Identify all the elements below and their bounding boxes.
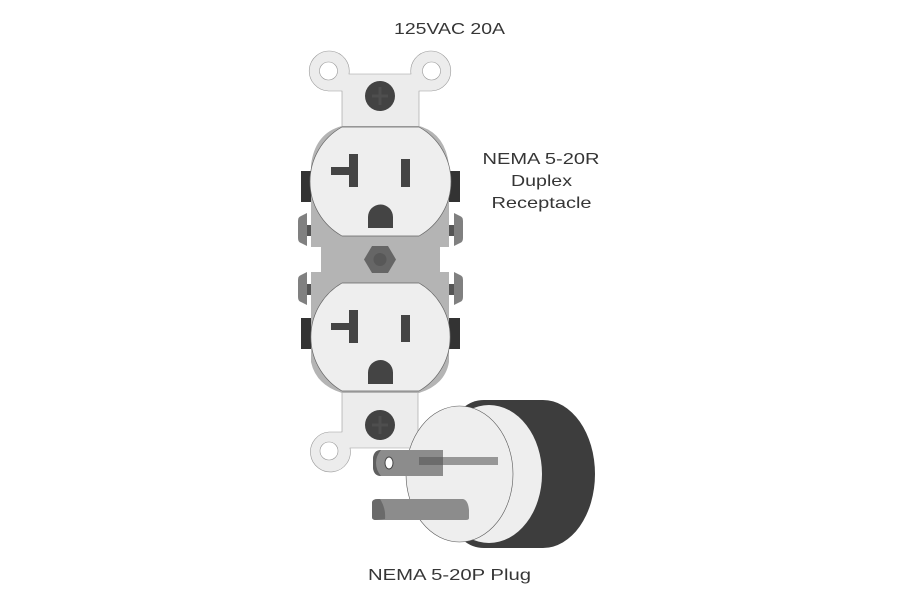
title: rating: 125VAC 20A: [394, 21, 505, 38]
label: receptacle: Receptacle: [492, 195, 592, 212]
bottom outlet ground hole: [368, 360, 393, 384]
right terminals: [449, 171, 463, 349]
center hex nut: [364, 246, 396, 273]
plug: [372, 400, 595, 548]
left terminals: [298, 171, 312, 349]
top outlet hot slot: [401, 159, 410, 187]
top outlet neutral T slot: [331, 154, 358, 187]
neutral blade: [373, 450, 498, 476]
top mounting screw: [365, 81, 395, 111]
duplex receptacle: [298, 51, 463, 472]
plug black body: [463, 400, 595, 548]
bottom mounting screw: [365, 410, 395, 440]
bottom outlet neutral T slot: [331, 310, 358, 343]
top mounting plate: [309, 51, 451, 127]
top outlet face: [310, 127, 451, 236]
top outlet ground hole: [368, 204, 393, 228]
plug front face: [406, 406, 513, 542]
hot blade: [372, 499, 469, 520]
label: receptacle: Duplex: [511, 173, 572, 190]
plug white collar: [436, 405, 542, 543]
bottom mounting plate: [310, 391, 418, 472]
label: receptacle: [482, 151, 600, 212]
label: plug: NEMA 5-20P Plug: [368, 567, 531, 584]
bottom outlet face: [311, 283, 450, 391]
bottom outlet hot slot: [401, 315, 410, 342]
metal body: [311, 126, 449, 393]
label: receptacle: NEMA 5-20R: [482, 151, 600, 168]
